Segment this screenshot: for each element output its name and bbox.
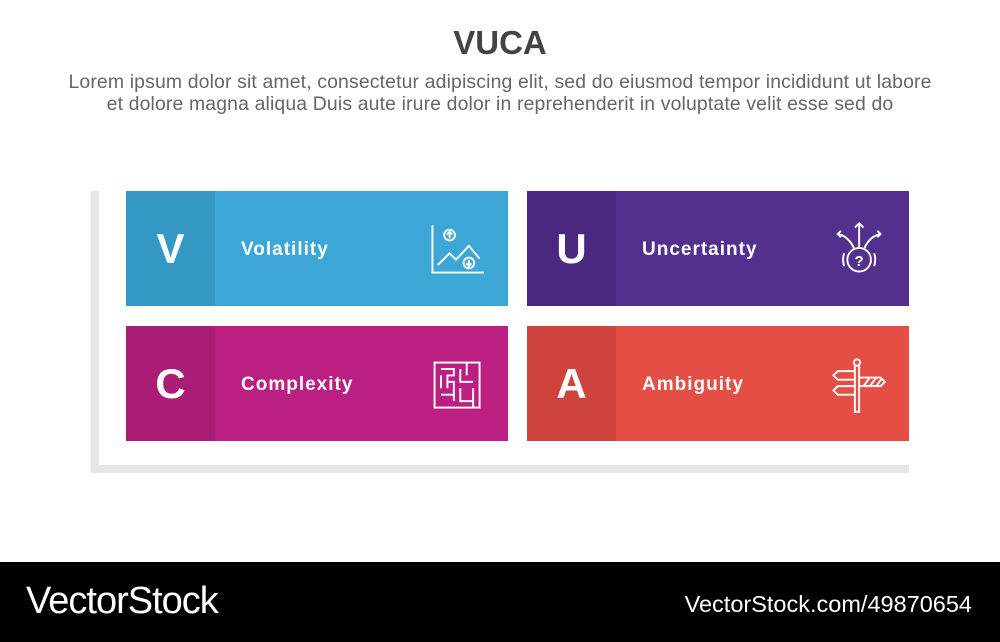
- card: complexity: C: [155, 360, 186, 407]
- card: ambiguity: A: [556, 360, 587, 407]
- card: uncertainty: U: [556, 225, 587, 272]
- card: volatility: V: [156, 225, 184, 272]
- icon: question arrows: ?: [855, 253, 864, 270]
- subtitle text: Lorem ipsum dolor sit amet, consectetur adipiscing elit, sed do eiusmod tempor incididunt ut labore: [68, 71, 932, 93]
- card: ambiguity: Ambiguity: [642, 374, 744, 395]
- icon: chart: [431, 225, 484, 274]
- footer brand: VectorStock: [26, 580, 218, 622]
- icon: maze: [434, 362, 481, 409]
- subtitle text: et dolore magna aliqua Duis aute irure dolor in reprehenderit in voluptate velit esse sed do: [107, 93, 893, 115]
- card: complexity: [126, 326, 508, 441]
- footer url: VectorStock.com/49870654: [685, 591, 972, 617]
- title: VUCA: [453, 24, 547, 61]
- card: volatility: Volatility: [241, 239, 329, 260]
- footer: [0, 562, 1000, 642]
- icon: question arrows: [836, 222, 882, 272]
- frame: [91, 191, 909, 473]
- card: complexity: Complexity: [241, 374, 353, 395]
- card: ambiguity: [527, 326, 909, 441]
- subtitle text: [68, 71, 932, 115]
- card: uncertainty: [527, 191, 909, 306]
- icon: signpost: [832, 358, 886, 413]
- card: uncertainty: Uncertainty: [642, 239, 758, 260]
- card: volatility: [126, 191, 508, 306]
